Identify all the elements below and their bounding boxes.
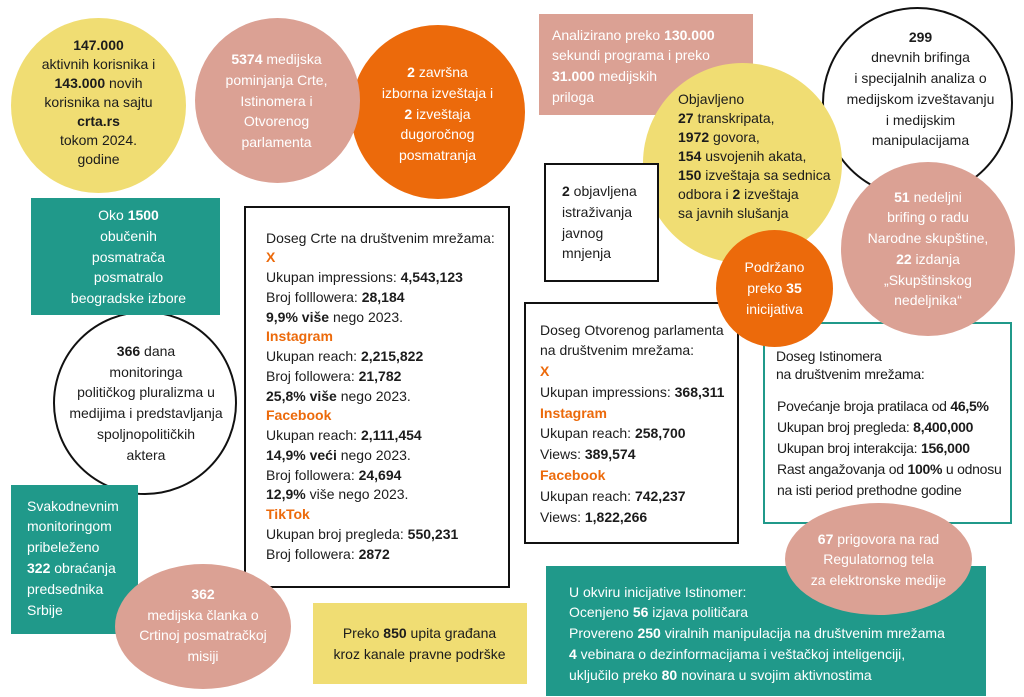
section: TikTok: Ukupan broj pregleda: 550,231: [266, 526, 458, 542]
panel: president addresses: monitoringom: [27, 518, 112, 534]
circle: monitoring days: [53, 311, 237, 495]
panel: Istinomer social reach: na isti period prethodne godine: [777, 482, 962, 498]
section: X: Ukupan impressions: 4,543,123: [266, 269, 463, 285]
panel: president addresses: predsednika: [27, 581, 103, 597]
section: TikTok: Broj followera: 2872: [266, 546, 390, 562]
circle: media mentions: [195, 18, 360, 183]
circle: weekly briefing: „Skupštinskog: [884, 272, 972, 288]
circle: published transcripts: [643, 63, 842, 263]
section: Instagram: Ukupan reach: 2,215,822: [266, 348, 423, 364]
circle: website users: 143.000 novih: [55, 75, 142, 91]
section: X: 9,9% više nego 2023.: [266, 309, 403, 325]
panel: Istinomer social reach: Ukupan broj interakcija: 156,000: [777, 440, 970, 456]
circle: final election reports: 2 završna: [407, 64, 468, 80]
panel: public opinion research: 2 objavljena: [562, 183, 637, 199]
circle: monitoring days: spoljnopolitičkih: [97, 426, 195, 442]
circle: website users: aktivnih korisnika i: [42, 56, 155, 72]
circle: monitoring days: medijima i predstavljanja: [69, 405, 223, 421]
section: Instagram: 25,8% više nego 2023.: [266, 388, 411, 404]
panel: Istinomer initiative: U okviru inicijative Istinomer:: [569, 584, 746, 600]
circle: final election reports: izborna izveštaja i: [382, 85, 493, 101]
panel: Otvoreni parlament social reach: Ukupan impressions: 368,311: [540, 384, 724, 400]
panel: Istinomer social reach: Ukupan broj pregleda: 8,400,000: [777, 419, 973, 435]
section: Facebook: [266, 407, 422, 502]
circle: website users: korisnika na sajtu: [44, 94, 153, 110]
section: X: [266, 249, 463, 325]
section: Instagram: Broj followera: 21,782: [266, 368, 401, 384]
circle: daily briefings: 299: [909, 28, 932, 44]
circle: weekly briefing: nedeljnika“: [894, 292, 962, 308]
circle: weekly briefing: 22 izdanja: [896, 251, 960, 267]
circle: media mentions: Istinomera i: [240, 93, 313, 109]
circle: published transcripts: 150 izveštaja sa sednica: [678, 167, 831, 183]
circle: daily briefings: dnevnih brifinga: [871, 49, 970, 65]
panel: trained observers: posmatrača: [92, 249, 165, 265]
section: Facebook: Broj followera: 24,694: [266, 467, 401, 483]
circle: media mentions: pominjanja Crte,: [226, 72, 327, 88]
circle: supported initiatives: preko 35: [747, 280, 802, 296]
circle: weekly briefing: Narodne skupštine,: [868, 230, 988, 246]
section: X: Broj folllowera: 28,184: [266, 289, 405, 305]
circle: media mentions: 5374 medijska: [231, 51, 322, 67]
ellipse: media articles: 362: [191, 586, 215, 602]
ellipse: complaints: 67 prigovora na rad: [818, 530, 939, 546]
panel: analyzed programme seconds: 31.000 medijskih: [552, 68, 657, 84]
ellipse: complaints: [785, 503, 972, 615]
section: Instagram: Instagram: [266, 328, 333, 344]
panel: analyzed programme seconds: [539, 14, 753, 115]
section: X: X: [266, 249, 275, 265]
circle: website users: tokom 2024.: [60, 132, 137, 148]
panel: Istinomer social reach: na društvenim mrežama:: [776, 366, 925, 382]
panel: Istinomer social reach: Povećanje broja pratilaca od 46,5%: [777, 398, 989, 414]
panel: trained observers: posmatralo: [94, 269, 163, 285]
circle: monitoring days: monitoringa: [109, 364, 183, 380]
panel: trained observers: obučenih: [100, 228, 157, 244]
ellipse: media articles: misiji: [187, 648, 219, 664]
section: Instagram: [266, 328, 423, 404]
section: TikTok: [266, 506, 458, 562]
panel: analyzed programme seconds: Analizirano preko 130.000: [552, 26, 715, 42]
panel: Istinomer initiative: Provereno 250 viralnih manipulacija na društvenim mrežama: [569, 625, 945, 641]
panel: Otvoreni parlament social reach: na društvenim mrežama:: [540, 342, 694, 358]
panel: trained observers: beogradske izbore: [71, 290, 186, 306]
panel: trained observers: Oko 1500: [98, 207, 159, 223]
circle: monitoring days: 366 dana: [117, 343, 175, 359]
section: Facebook: 14,9% veći nego 2023.: [266, 447, 411, 463]
section: Facebook: Ukupan reach: 2,111,454: [266, 427, 422, 443]
circle: monitoring days: političkog pluralizma u: [77, 384, 215, 400]
circle: final election reports: dugoročnog: [401, 126, 474, 142]
panel: Otvoreni parlament social reach: Doseg Otvorenog parlamenta: [540, 322, 724, 338]
section: TikTok: TikTok: [266, 506, 310, 522]
panel: legal support: kroz kanale pravne podrške: [334, 646, 506, 662]
ellipse: media articles: [115, 564, 291, 689]
circle: daily briefings: medijskom izveštavanju: [847, 91, 994, 107]
panel: Otvoreni parlament social reach: Facebook: [540, 467, 605, 483]
circle: final election reports: 2 izveštaja: [404, 106, 471, 122]
circle: weekly briefing: 51 nedeljni: [894, 188, 962, 204]
circle: published transcripts: 1972 govora,: [678, 129, 760, 145]
panel: analyzed programme seconds: sekundi programa i preko: [552, 47, 710, 63]
circle: weekly briefing: brifing o radu: [887, 209, 969, 225]
panel: president addresses: Srbije: [27, 602, 63, 618]
heading: Crta reach: Doseg Crte na društvenim mrežama:: [266, 230, 495, 246]
panel: public opinion research: javnog: [562, 225, 603, 241]
panel: Otvoreni parlament social reach: Ukupan reach: 258,700: [540, 425, 686, 441]
circle: monitoring days: aktera: [127, 447, 165, 463]
circle: published transcripts: 154 usvojenih akata,: [678, 148, 806, 164]
panel: Otvoreni parlament social reach: Instagram: [540, 405, 607, 421]
circle: daily briefings: i medijskim: [886, 112, 955, 128]
circle: supported initiatives: Podržano: [745, 259, 804, 275]
panel: Otvoreni parlament social reach: Ukupan reach: 742,237: [540, 488, 686, 504]
circle: media mentions: parlamenta: [241, 134, 312, 150]
ellipse: media articles: medijska članka o: [147, 607, 259, 623]
panel: Istinomer social reach: Doseg Istinomera: [776, 348, 882, 364]
panel: Istinomer initiative: Ocenjeno 56 izjava političara: [569, 604, 748, 620]
panel: public opinion research: mnjenja: [562, 245, 611, 261]
panel: legal support: [313, 603, 527, 684]
panel: legal support: Preko 850 upita građana: [343, 625, 496, 641]
panel: Otvoreni parlament social reach: Views: 1,822,266: [540, 509, 647, 525]
circle: daily briefings: manipulacijama: [872, 132, 969, 148]
circle: published transcripts: 27 transkripata,: [678, 110, 775, 126]
panel: Istinomer initiative: uključilo preko 80 novinara u svojim aktivnostima: [569, 667, 872, 683]
ellipse: media articles: Crtinoj posmatračkoj: [139, 627, 267, 643]
panel: Istinomer initiative: [546, 566, 986, 696]
panel: Otvoreni parlament social reach: Views: 389,574: [540, 446, 635, 462]
circle: website users: godine: [77, 151, 120, 167]
section: Facebook: Facebook: [266, 407, 331, 423]
panel: president addresses: [11, 485, 138, 634]
circle: daily briefings: i specijalnih analiza o: [854, 70, 987, 86]
circle: final election reports: posmatranja: [399, 147, 476, 163]
panel: president addresses: Svakodnevnim: [27, 498, 119, 514]
panel: Otvoreni parlament social reach: [524, 302, 739, 544]
panel: Crta social reach: [244, 206, 510, 588]
circle: weekly briefing: [841, 162, 1015, 336]
circle: published transcripts: sa javnih slušanja: [678, 205, 789, 221]
circle: published transcripts: Objavljeno: [678, 91, 744, 107]
ellipse: complaints: za elektronske medije: [811, 572, 946, 588]
circle: final election reports: [351, 25, 525, 199]
ellipse: complaints: Regulatornog tela: [823, 551, 934, 567]
panel: Istinomer social reach: [763, 322, 1012, 524]
panel: president addresses: 322 obraćanja: [27, 560, 116, 576]
circle: supported initiatives: [716, 230, 833, 347]
circle: supported initiatives: inicijativa: [746, 301, 803, 317]
panel: public opinion research: istraživanja: [562, 204, 632, 220]
panel: analyzed programme seconds: priloga: [552, 89, 594, 105]
circle: website users: 147.000: [73, 37, 124, 53]
panel: Otvoreni parlament social reach: X: [540, 363, 549, 379]
circle: website users: crta.rs: [77, 113, 120, 129]
circle: daily briefings: [822, 7, 1013, 198]
section: Facebook: 12,9% više nego 2023.: [266, 486, 408, 502]
panel: Istinomer social reach: Rast angažovanja od 100% u odnosu: [777, 461, 1002, 477]
circle: media mentions: Otvorenog: [244, 113, 309, 129]
panel: public opinion research: [544, 163, 659, 282]
panel: trained observers: [31, 198, 220, 315]
panel: Istinomer initiative: 4 vebinara o dezinformacijama i veštačkoj inteligenciji,: [569, 646, 905, 662]
circle: published transcripts: odbora i 2 izveštaja: [678, 186, 799, 202]
panel: president addresses: pribeleženo: [27, 539, 99, 555]
circle: website users: [11, 18, 186, 193]
